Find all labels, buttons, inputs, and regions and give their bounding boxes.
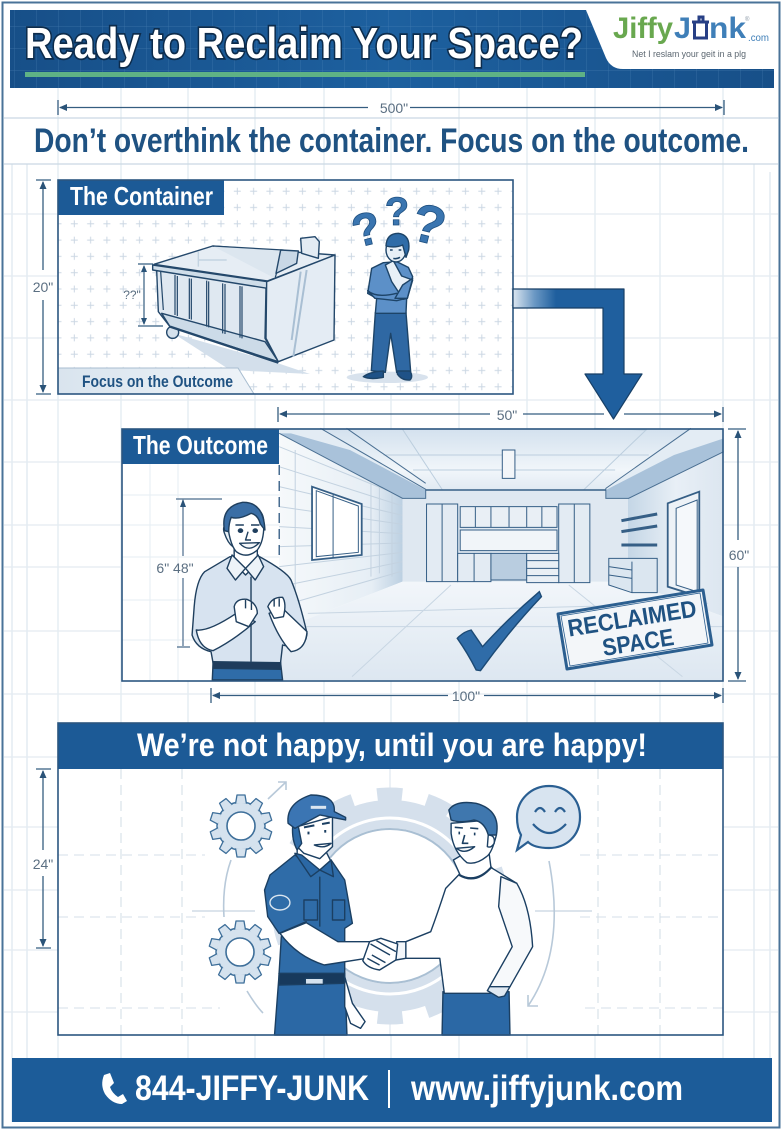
stamp: reclaimed space: RECLAIMED (566, 595, 698, 642)
label tag: the outcome: The Outcome (133, 430, 268, 460)
green title underline (25, 72, 585, 77)
dimension: 20 inch: 20" (33, 279, 53, 295)
arrows: cycle curves (224, 782, 554, 1013)
logo: Jiffy Junk: Net I reslam your geit in a plg (632, 49, 746, 60)
heading band: not happy until you are happy (58, 723, 723, 769)
illustration: clean garage (279, 428, 724, 680)
ceiling beams (279, 428, 426, 498)
footer band (12, 1058, 772, 1122)
check mark (457, 592, 541, 671)
tag: focus on the outcome (58, 368, 254, 394)
question marks (346, 190, 452, 258)
dimension: 60 inch (728, 429, 749, 681)
heading band: not happy until you are happy: We’re not happy, until you are happy! (137, 727, 647, 763)
icon: phone (102, 1073, 127, 1104)
dimension: 24 inch (33, 769, 53, 948)
dimension: 50 inch: 50" (497, 407, 517, 423)
illustration: happy man (192, 502, 307, 680)
website: www.jiffyjunk.com (410, 1069, 683, 1108)
dimension: 100 inch (211, 688, 723, 704)
dimension: 50 inch (278, 407, 723, 423)
question marks: ? (346, 200, 386, 258)
dimension: unknown dumpster height: ??" (123, 288, 141, 302)
shelves (621, 514, 657, 545)
dimension: 6 inch 48 inch height (156, 499, 222, 647)
dimension: 500 inch: 500" (380, 100, 408, 116)
question marks: ? (405, 192, 452, 258)
dimension: 60 inch: 60" (729, 547, 749, 563)
logo: Jiffy Junk: J (674, 12, 691, 45)
dimension: 100 inch: 100" (452, 688, 480, 704)
dimension: unknown dumpster height (123, 264, 163, 326)
icon: small gear bottom (209, 921, 271, 983)
panel: the container (58, 180, 513, 394)
icon: large gear (280, 796, 500, 1016)
logo: Jiffy Junk (613, 12, 769, 60)
logo: Jiffy Junk: .com (748, 33, 769, 44)
door (668, 492, 699, 597)
arrow: container to outcome (513, 289, 642, 419)
dimension: 20 inch (33, 180, 53, 394)
logo: Jiffy Junk: Jiffy (613, 12, 673, 45)
phone number: 844-JIFFY-JUNK (135, 1069, 369, 1108)
dimension: 500 inch (58, 100, 724, 116)
dimension: 6 inch 48 inch height: 6" 48" (156, 560, 194, 576)
stamp: reclaimed space: SPACE (600, 624, 676, 662)
header banner (10, 10, 774, 88)
dimension: 24 inch: 24" (33, 856, 53, 872)
logo: Jiffy Junk: ® (745, 16, 750, 23)
window (312, 487, 362, 560)
illustration: confused man (347, 233, 428, 383)
tag: focus on the outcome: Focus on the Outcome (82, 372, 233, 391)
stamp: reclaimed space (558, 590, 712, 669)
logo: Jiffy Junk: nk (709, 12, 746, 45)
question marks: ? (385, 190, 409, 234)
panel: happy customer (58, 723, 723, 1035)
illustration: technician (265, 795, 370, 1035)
left-wall dashed edge (278, 465, 280, 560)
illustration: dumpster (153, 237, 335, 374)
illustration: customer (363, 802, 533, 1035)
icon: smiley speech bubble (517, 786, 580, 850)
icon: small gear top (210, 795, 272, 857)
title: Ready to Reclaim Your Space? (25, 19, 583, 68)
label tag: the container: The Container (70, 181, 213, 211)
panel: the outcome (122, 428, 724, 681)
cabinets (427, 504, 458, 582)
